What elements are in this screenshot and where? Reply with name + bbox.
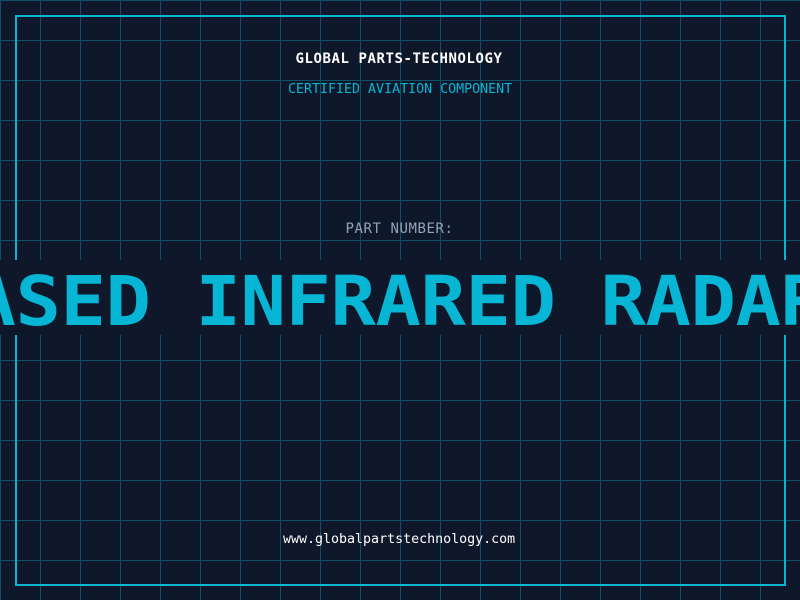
company name heading: GLOBAL PARTS-TECHNOLOGY [296, 51, 502, 67]
part number band [0, 260, 800, 342]
part number label: PART NUMBER: [346, 221, 454, 237]
website url: www.globalpartstechnology.com [283, 532, 515, 547]
subtitle: CERTIFIED AVIATION COMPONENT [288, 82, 512, 97]
